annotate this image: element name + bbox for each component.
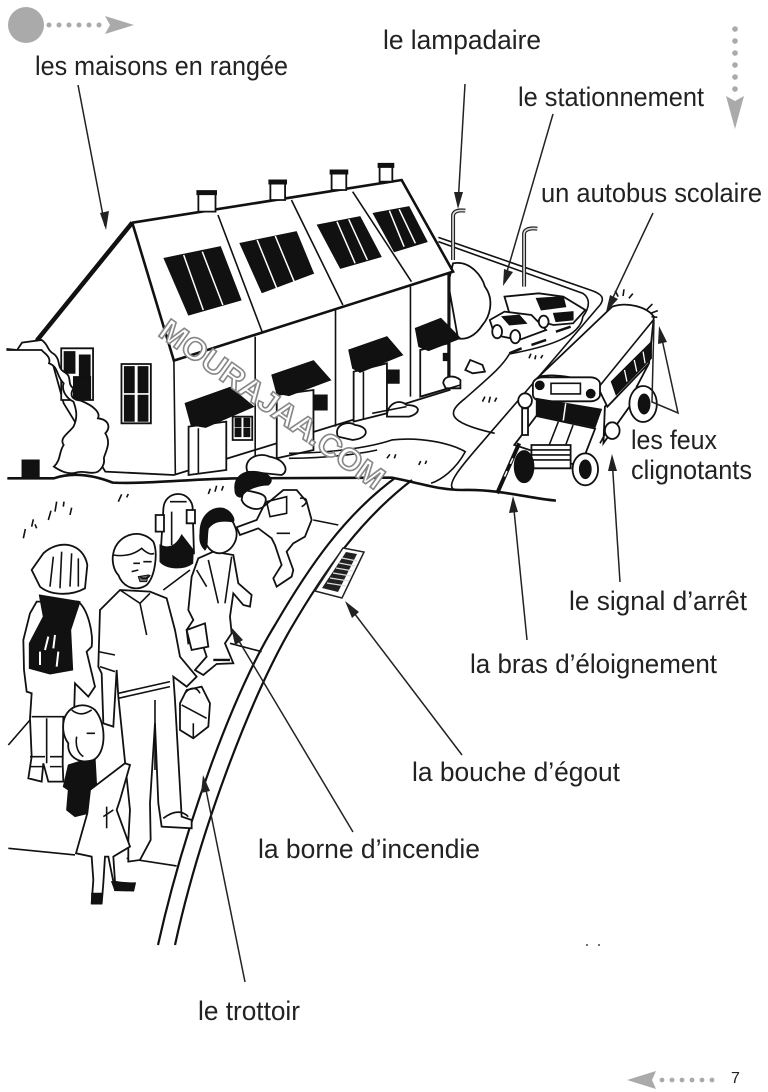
- page number: 7: [731, 1070, 740, 1087]
- arrow: le signal d'arrêt: [608, 454, 620, 582]
- back road fence lines: [438, 237, 602, 490]
- label: les feux clignotants: clignotants: [631, 455, 752, 485]
- school bus: [497, 289, 658, 493]
- lamp posts: [453, 210, 537, 287]
- parked cars: [490, 293, 585, 353]
- roof partitions: [174, 192, 448, 475]
- sidewalk joints: [8, 520, 338, 866]
- tree by the last house: [448, 263, 490, 339]
- navigation arrow: top right: [726, 26, 744, 129]
- street scene: houses and road: [7, 163, 658, 501]
- label: le lampadaire: le lampadaire: [383, 25, 541, 55]
- label: la bras d'éloignement: la bras d’éloignement: [470, 649, 717, 679]
- arrow: les maisons en rangée: [78, 85, 109, 230]
- label: le signal d'arrêt: le signal d’arrêt: [569, 586, 747, 616]
- small specks: [586, 944, 600, 946]
- dark shrub base: [22, 460, 39, 478]
- house walls and roof: [37, 180, 453, 475]
- label: les maisons en rangée: les maisons en rangée: [35, 51, 288, 81]
- label: la borne d'incendie: la borne d’incendie: [258, 834, 480, 864]
- little girl: [63, 705, 135, 904]
- arrow: la borne d'incendie: [231, 627, 353, 832]
- chimneys: [197, 163, 394, 212]
- gable windows: [61, 348, 151, 423]
- label: la bouche d'égout: la bouche d’égout: [412, 757, 620, 787]
- arrow: le stationnement: [503, 114, 553, 286]
- ground line: [7, 475, 556, 501]
- label: le stationnement: le stationnement: [518, 82, 704, 112]
- arrow: la bras d'éloignement: [509, 496, 527, 640]
- arrow: le lampadaire: [454, 84, 465, 209]
- arrow: le trottoir: [201, 775, 245, 982]
- arrows: les feux clignotants: [652, 320, 678, 413]
- flashing light sparks: [615, 289, 658, 317]
- storm drain grate: [315, 548, 364, 598]
- grass tufts: [387, 354, 543, 465]
- front porches and doors: [185, 318, 460, 475]
- watermark: MOURAJAA.COM: [153, 312, 391, 496]
- walkways: [289, 385, 465, 483]
- man with lunch box: [98, 534, 210, 862]
- shrubs: [246, 360, 485, 475]
- label: le trottoir: le trottoir: [198, 996, 300, 1026]
- skylights: [164, 207, 427, 315]
- grass tufts on the lawn: [23, 486, 223, 538]
- people and sidewalk: [8, 471, 338, 904]
- label: les feux clignotants: les feux: [631, 425, 717, 455]
- arrow: un autobus scolaire: [606, 213, 653, 312]
- girl with dark hair: [187, 508, 252, 675]
- navigation arrow: top left: [8, 7, 134, 43]
- left bush: [7, 340, 108, 473]
- child with backpack: [23, 545, 95, 782]
- running child: [235, 471, 312, 587]
- arrow: la bouche d'égout: [345, 601, 462, 755]
- navigation arrow: bottom: [627, 1071, 714, 1089]
- fire hydrant: [156, 494, 195, 568]
- road curbs: [158, 478, 412, 945]
